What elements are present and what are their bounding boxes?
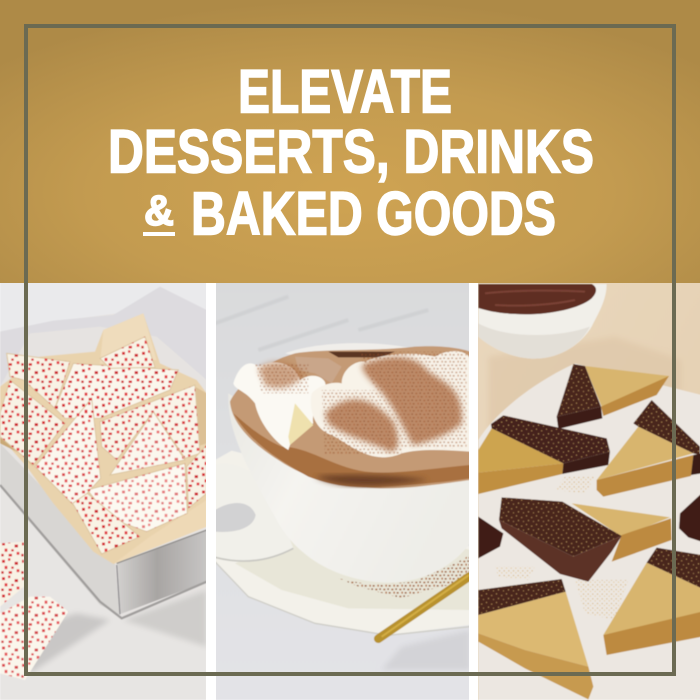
panel: chocolate-dipped shortbread [475,280,700,700]
foam top [230,346,470,488]
shortbread centre with chocolate side [499,497,672,582]
parchment paper liner [0,313,207,564]
gold spoon [378,575,469,639]
parchment sheet [478,363,700,700]
panel: peppermint bark in tin [0,280,207,700]
marble surface and fabric backdrop [0,280,207,700]
cocoa dusting [255,352,467,455]
wood surface [475,280,700,700]
cup body [228,343,470,583]
header band [0,0,700,283]
loose bark pieces [0,542,68,680]
bowl of melted chocolate [478,284,607,359]
shortbread right [597,400,700,497]
red sprinkle overlay [0,337,207,554]
shortbread bottom left [478,579,593,699]
shortbread left [478,415,610,494]
ampersand with underline: & [144,187,174,235]
title [108,58,594,248]
whipped cream [233,351,470,457]
cocoa specks on saucer [338,555,470,598]
saucer [215,451,470,635]
title line 2: DESSERTS, DRINKS [108,118,594,186]
shortbread bottom right [603,548,700,655]
small chocolate pieces at panel edges [478,493,700,558]
cup handle [216,502,294,562]
title line 1: ELEVATE [238,58,452,126]
panel: hot cocoa mug [215,280,470,700]
title line 3: BAKED GOODS [191,180,556,248]
shortbread top centre [557,364,669,429]
bark shards with red sprinkles [0,337,207,554]
tin tray [0,443,207,618]
marble backdrop [215,280,470,700]
